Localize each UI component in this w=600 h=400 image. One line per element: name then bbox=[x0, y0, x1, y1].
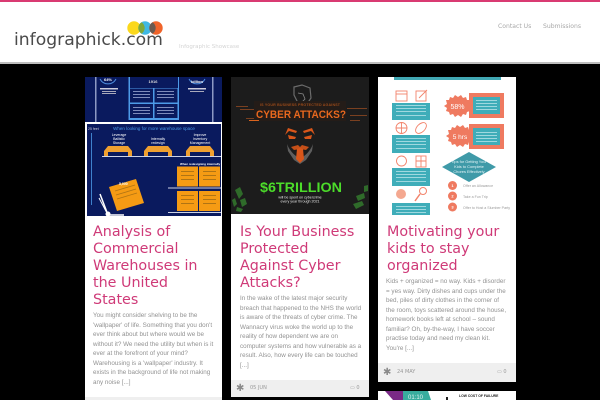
panel: cyber attacks card bbox=[231, 77, 369, 397]
kids organization infographic image: 5 hrs bbox=[453, 134, 468, 141]
card excerpt bbox=[93, 312, 214, 386]
card excerpt: practise today and need my clean kit. bbox=[386, 335, 490, 342]
warehouse infographic image: Internally bbox=[151, 137, 165, 141]
date: 24 MAY bbox=[397, 369, 415, 375]
warehouse infographic image: 5,000 bbox=[119, 182, 128, 186]
comment count: ▭ 0 bbox=[497, 369, 506, 375]
cyber attacks infographic image: will be spent on cybercrime bbox=[278, 196, 322, 200]
card excerpt: ever at the forefront of your mind? bbox=[93, 350, 188, 357]
warehouse infographic image: 25 feet bbox=[88, 127, 99, 131]
card title bbox=[93, 224, 197, 308]
logo wordmark: infographick.com bbox=[14, 30, 163, 50]
date: 05 JUN bbox=[250, 385, 267, 391]
card excerpt: result. Also, how every life can be touched bbox=[240, 352, 358, 359]
card excerpt: any noise [...] bbox=[93, 378, 130, 386]
warehouse infographic image: When looking for more warehouse space bbox=[113, 126, 195, 131]
card footer bbox=[378, 363, 516, 382]
card excerpt: familiar? Oh, by-the-way, I have soccer bbox=[386, 326, 495, 332]
header bar bbox=[0, 0, 600, 64]
icon: gear: ✱ bbox=[236, 383, 244, 394]
kids organization infographic image: Take a Fun Trip bbox=[463, 195, 488, 199]
kids organization infographic image: Kids to Complete bbox=[454, 164, 484, 169]
card excerpt: You're [...] bbox=[386, 344, 414, 352]
kids organization infographic image: Chores Effectively bbox=[453, 169, 485, 174]
card title: kids to stay bbox=[387, 241, 470, 257]
card excerpt: = yes way. Dirty dishes and cups under the bbox=[386, 288, 506, 294]
card excerpt: ever think about but where would we be bbox=[93, 331, 204, 338]
warehouse infographic image: Inventory bbox=[193, 137, 207, 141]
warehouse infographic image: Improve bbox=[194, 133, 206, 137]
cyber attacks infographic image: every year through 2021 bbox=[281, 200, 319, 204]
cyber attacks infographic image bbox=[231, 77, 369, 214]
warehouse infographic image: 64% bbox=[104, 77, 112, 82]
header shadow line bbox=[0, 62, 600, 64]
card title: Is Your Business bbox=[240, 224, 354, 240]
kids organization infographic image: 58% bbox=[450, 104, 465, 111]
card excerpt: Warehousing is a 'wallpaper' industry. It bbox=[93, 360, 203, 366]
kids organization infographic image: 2 bbox=[451, 194, 454, 198]
preview image bbox=[385, 391, 499, 400]
card excerpt: 'wallpaper' of life. Something that you don't bbox=[93, 322, 212, 328]
card excerpt bbox=[386, 278, 506, 352]
kids organization infographic image: Offer an Allowance bbox=[463, 184, 493, 188]
card title: States bbox=[93, 292, 138, 308]
card excerpt: computer systems and how vulnerable as a bbox=[240, 342, 361, 350]
kids organization infographic image: Offer to Host a Slumber Party bbox=[463, 206, 510, 210]
kids organization infographic image bbox=[392, 77, 510, 215]
card excerpt: exists in the background of life not making bbox=[93, 369, 210, 376]
card title: Attacks? bbox=[240, 275, 301, 291]
cyber attacks infographic image: CYBER ATTACKS? bbox=[256, 109, 346, 121]
card title: Protected bbox=[240, 241, 308, 257]
icon: gear: ✱ bbox=[383, 367, 391, 378]
card footer bbox=[85, 397, 223, 400]
card title: Commercial bbox=[93, 241, 179, 257]
card excerpt: [...] bbox=[240, 362, 249, 368]
card title: Against Cyber bbox=[240, 258, 340, 274]
card title: Warehouses in bbox=[93, 258, 197, 274]
kids organization infographic image: 1 bbox=[451, 183, 454, 188]
card excerpt: breach that happened to the NHS the world bbox=[240, 304, 361, 312]
card excerpt: In the wake of the latest major security bbox=[240, 295, 347, 302]
comment count: ▭ 0 bbox=[350, 385, 360, 391]
card title bbox=[387, 224, 500, 274]
card excerpt: Kids + organized = no way. Kids + disorder bbox=[386, 278, 505, 285]
card title: the United bbox=[93, 275, 168, 291]
card excerpt: bed, piles of dirty clothes in the corner of bbox=[386, 297, 499, 304]
warehouse infographic image: redesign bbox=[151, 141, 165, 145]
warehouse infographic image: billion bbox=[191, 79, 203, 84]
warehouse infographic image: Storage bbox=[113, 141, 125, 145]
warehouse infographic image: Leverage bbox=[112, 133, 126, 137]
card excerpt: the room, toys scattered around the house, bbox=[386, 306, 506, 314]
cyber attacks infographic image: IS YOUR BUSINESS PROTECTED AGAINST bbox=[260, 103, 341, 107]
card title: Analysis of bbox=[93, 224, 170, 240]
panel: organized kids card bbox=[378, 77, 516, 382]
pink top stripe bbox=[0, 0, 600, 2]
kids organization infographic image: 3 bbox=[451, 204, 454, 210]
card excerpt: is aware of the threats of cyber crime. The bbox=[240, 314, 357, 321]
card excerpt: reality of how dependent we are on bbox=[240, 333, 338, 340]
card title bbox=[240, 224, 354, 291]
card excerpt: Wannacry virus woke the world up to the bbox=[240, 324, 353, 330]
logo bbox=[14, 21, 163, 50]
kids organization infographic image: Tips for Getting Your bbox=[451, 159, 487, 164]
panel: next card preview bbox=[378, 391, 516, 400]
card footer bbox=[231, 380, 369, 397]
warehouse infographic image: Management bbox=[190, 141, 210, 145]
warehouse infographic image bbox=[85, 77, 222, 216]
warehouse infographic image: When redesigning internally bbox=[180, 162, 221, 166]
panel: warehouses card bbox=[85, 77, 222, 400]
logo circles bbox=[127, 21, 163, 35]
nav: submissions: Submissions bbox=[543, 23, 581, 30]
warehouse infographic image: 1916 bbox=[149, 79, 158, 84]
card excerpt: without it? We need the utility but when is it bbox=[93, 340, 213, 348]
card excerpt: homework books left at school – sound bbox=[386, 316, 495, 323]
warehouse infographic image: Ballistic bbox=[113, 137, 125, 141]
preview image: LOW COST OF FAILURE bbox=[459, 394, 499, 398]
card title: organized bbox=[387, 258, 458, 274]
card title: Motivating your bbox=[387, 224, 499, 240]
nav: contact us: Contact Us bbox=[498, 23, 531, 30]
cyber attacks infographic image: $6TRILLION bbox=[260, 180, 342, 195]
card excerpt: You might consider shelving to be the bbox=[93, 312, 197, 319]
tagline: Infographic Showcase bbox=[179, 44, 239, 50]
card excerpt bbox=[240, 295, 362, 368]
